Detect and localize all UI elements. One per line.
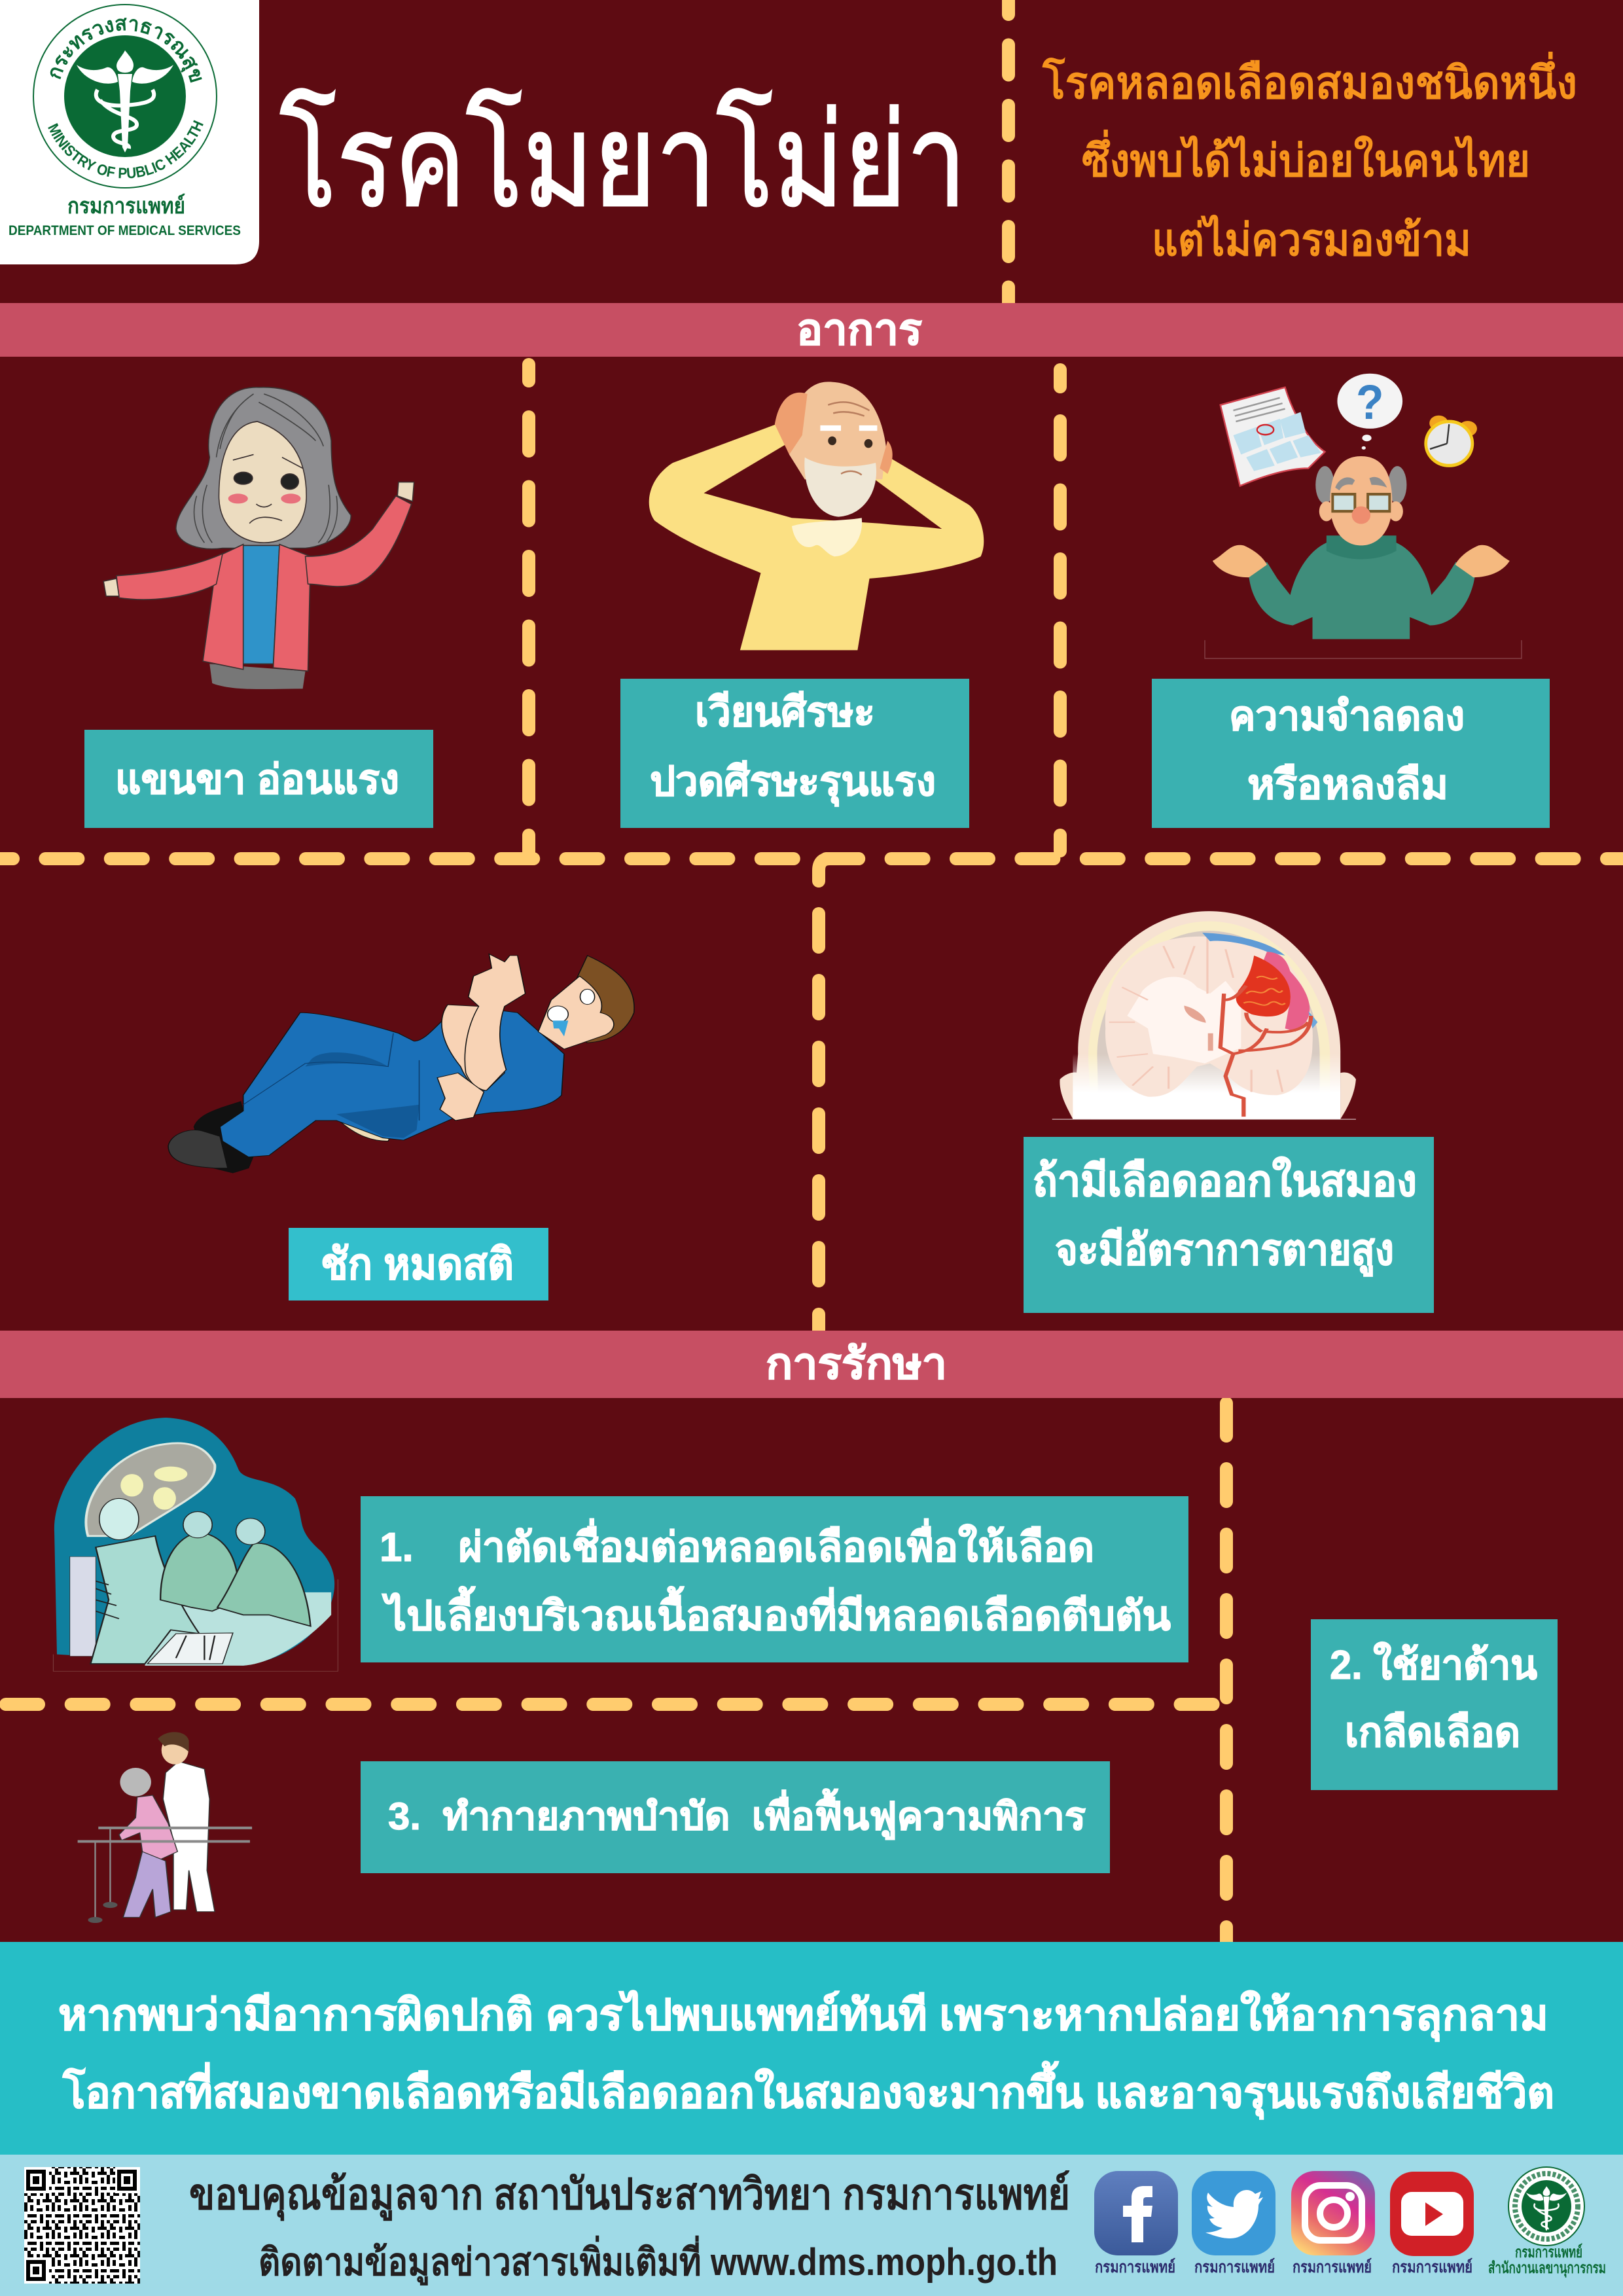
box: treatment 3: 3. ทำกายภาพบำบัด เพื่อฟื้นฟูความพิการ	[388, 1789, 1086, 1840]
logo emblem: MINISTRY OF PUBLIC HEALTH	[48, 120, 204, 178]
illustration: woman with weak limbs	[103, 387, 414, 689]
logo caption thai: กรมการแพทย์	[67, 193, 185, 219]
website text: ติดตามข้อมูลข่าวสารเพิ่มเติมที่ www.dms.moph.go.th	[259, 2235, 1058, 2286]
alarm clock	[1426, 416, 1477, 465]
icon labels	[1095, 2257, 1472, 2276]
small ministry logo	[1508, 2167, 1584, 2246]
box: memory loss: หรือหลงลืม	[1247, 762, 1448, 808]
band: treatment heading: การรักษา	[766, 1339, 947, 1388]
icon: facebook	[1094, 2171, 1178, 2255]
panel: footer	[0, 2155, 1623, 2296]
illustration: brain cross-section	[1052, 911, 1356, 1119]
box: treatment 1	[361, 1496, 1188, 1662]
box: weak limbs	[84, 730, 433, 828]
box: treatment 2: เกลืดเลือด	[1345, 1710, 1520, 1755]
icon: instagram	[1291, 2171, 1375, 2255]
box: dizziness headache: เวียนศีรษะ	[695, 690, 875, 735]
subtitle	[1042, 51, 1577, 265]
panel: advice	[0, 1942, 1623, 2155]
box: treatment 2	[1311, 1619, 1558, 1790]
icon: twitter	[1192, 2171, 1275, 2255]
subtitle: ซึ่งพบได้ไม่บ่อยในคนไทย	[1082, 129, 1530, 186]
panel: advice: โอกาสที่สมองขาดเลือดหรือมีเลือดออกในสมองจะมากขึ้น และอาจรุนแรงถึงเสียชีวิต	[62, 2060, 1554, 2120]
logo panel	[0, 0, 259, 264]
thought bubble	[1337, 374, 1402, 450]
illustration: seizure man	[168, 954, 634, 1173]
calendar	[1221, 387, 1325, 486]
logo emblem	[33, 4, 217, 188]
box: treatment 2: 2. ใช้ยาต้าน	[1330, 1641, 1537, 1688]
title: โรคโมยาโม่ย่า	[279, 88, 967, 233]
icon labels: กรมการแพทย์	[1194, 2257, 1275, 2276]
box: dizziness headache: ปวดศีรษะรุนแรง	[650, 759, 936, 806]
box: memory loss: ความจำลดลง	[1229, 694, 1465, 739]
thought bubble: ?	[1356, 376, 1384, 429]
box: treatment 1: ไปเลี้ยงบริเวณเนื้อสมองที่มีหลอดเลือดตีบตัน	[382, 1586, 1171, 1639]
illustration: physical therapy	[78, 1732, 252, 1923]
box: treatment 3	[361, 1761, 1110, 1873]
box: seizure: ชัก หมดสติ	[321, 1240, 514, 1288]
small logo caption	[1488, 2243, 1606, 2278]
icon labels: กรมการแพทย์	[1095, 2257, 1175, 2276]
subtitle: โรคหลอดเลือดสมองชนิดหนึ่ง	[1042, 51, 1577, 108]
QR code	[24, 2167, 140, 2284]
box: seizure	[289, 1228, 548, 1300]
box: bleeding warning: ถ้ามีเลือดออกในสมอง	[1033, 1155, 1417, 1205]
icon: youtube	[1390, 2172, 1474, 2256]
illustration: surgery team	[53, 1418, 338, 1671]
band: symptoms heading: อาการ	[796, 305, 922, 353]
panel: advice: หากพบว่ามีอาการผิดปกติ ควรไปพบแพทย์ทันที เพราะหากปล่อยให้อาการลุกลาม	[58, 1989, 1548, 2042]
illustration: forgetful old man	[1205, 374, 1522, 658]
icon labels: กรมการแพทย์	[1293, 2257, 1372, 2276]
logo emblem: กระทรวงสาธารณสุข	[50, 18, 202, 82]
box: bleeding warning: จะมีอัตราการตายสูง	[1055, 1225, 1394, 1277]
icon labels: กรมการแพทย์	[1392, 2257, 1472, 2276]
box: weak limbs: แขนขา อ่อนแรง	[115, 757, 399, 802]
small logo caption: กรมการแพทย์	[1515, 2243, 1582, 2261]
illustration: man holding head	[649, 382, 984, 650]
logo caption english: DEPARTMENT OF MEDICAL SERVICES	[9, 223, 241, 238]
band: symptoms heading	[0, 303, 1623, 357]
box: memory loss	[1152, 679, 1550, 828]
box: bleeding warning	[1024, 1137, 1434, 1313]
box: dizziness headache	[620, 679, 969, 828]
box: treatment 1: 1. ผ่าตัดเชื่อมต่อหลอดเลือดเพื่อให้เลือด	[380, 1518, 1094, 1570]
subtitle: แต่ไม่ควรมองข้าม	[1152, 214, 1471, 265]
credits text: ขอบคุณข้อมูลจาก สถาบันประสาทวิทยา กรมการแพทย์	[189, 2170, 1070, 2221]
band: treatment heading	[0, 1331, 1623, 1398]
